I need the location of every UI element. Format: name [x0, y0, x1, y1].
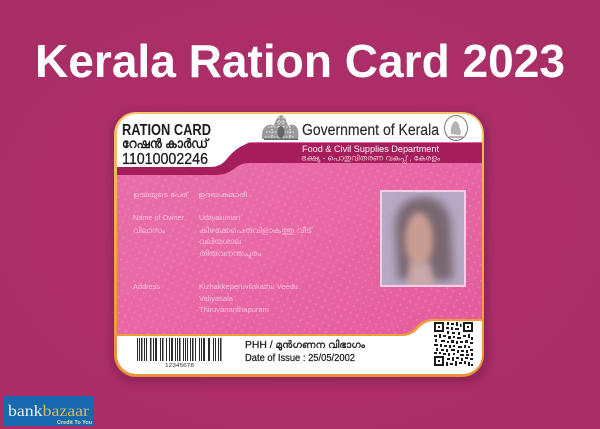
value: area malayalam: വലിയശാല — [199, 237, 241, 246]
card shadow — [111, 112, 489, 383]
category: PHH / മുൻഗണന വിഭാഗം — [245, 339, 366, 351]
icon: QR code — [434, 322, 473, 366]
title: Kerala Ration Card 2023 — [35, 35, 565, 87]
icon: state seal — [444, 116, 468, 140]
department name: Food & Civil Supplies Department — [302, 144, 440, 154]
card heading block — [122, 122, 211, 168]
pink body — [117, 114, 482, 336]
bankbazaar logo — [3, 396, 94, 426]
field: name of owner: Name of Owner — [133, 215, 185, 222]
value: house malayalam: കിഴക്കേപെരുവിളാകത്തു വീട് — [199, 226, 313, 235]
value: name malayalam: ഉദയകുമാരി — [198, 191, 248, 199]
barcode digits: 12345678 — [165, 363, 194, 369]
government heading: Government of Kerala — [302, 122, 439, 139]
card gold border — [114, 112, 484, 377]
value: address line 3: Thiruvananthapuram — [199, 307, 269, 314]
value: address line 2: Valiyasala — [199, 296, 233, 303]
logo tagline: Credit To You — [57, 420, 92, 426]
icon: kerala emblem — [262, 115, 298, 140]
field: address malayalam: വിലാസം — [133, 226, 166, 235]
card inner surface — [117, 114, 482, 374]
header white — [117, 114, 482, 167]
date of issue: Date of Issue : 25/05/2002 — [245, 353, 355, 364]
ration card — [111, 112, 489, 383]
ration card label: RATION CARD — [122, 122, 211, 139]
malayalam label: റേഷൻ കാർഡ് — [122, 136, 210, 151]
footer orange line — [117, 319, 482, 336]
footer white — [117, 321, 482, 374]
photo frame — [380, 190, 466, 287]
value: address line 1: Kizhakkeperuvilakathu Veedu — [199, 284, 298, 291]
blurred portrait — [395, 197, 453, 300]
value: owner: Udayakumari — [199, 215, 240, 222]
barcode — [137, 338, 222, 369]
field: address: Address — [133, 284, 161, 291]
logo wordmark: bank bazaar — [8, 403, 90, 420]
guilloche dots — [117, 163, 482, 335]
department name malayalam: ഭക്ഷ്യ - പൊതുവിതരണ വകുപ്പ് , കേരളം — [301, 154, 441, 163]
dark band under header — [117, 143, 482, 175]
value: city malayalam: തിരുവനന്തപുരം — [199, 249, 262, 258]
holder details — [133, 191, 313, 314]
field: name malayalam: ഉടമയുടെ പേര് — [133, 191, 190, 200]
card number: 11010002246 — [122, 151, 208, 168]
